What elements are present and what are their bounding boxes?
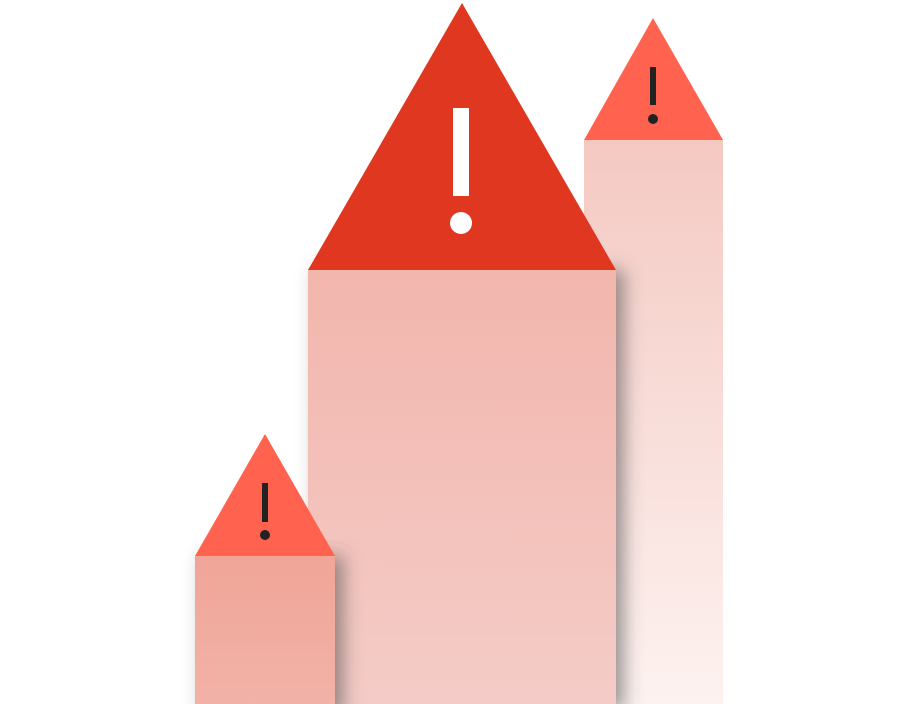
icon: exclamation right [648,67,658,124]
icon: exclamation left [260,483,270,540]
left bar with warning triangle [195,434,335,704]
right bar with warning triangle [584,18,723,704]
middle bar with big warning triangle [308,3,616,704]
icon: exclamation middle [450,108,472,234]
